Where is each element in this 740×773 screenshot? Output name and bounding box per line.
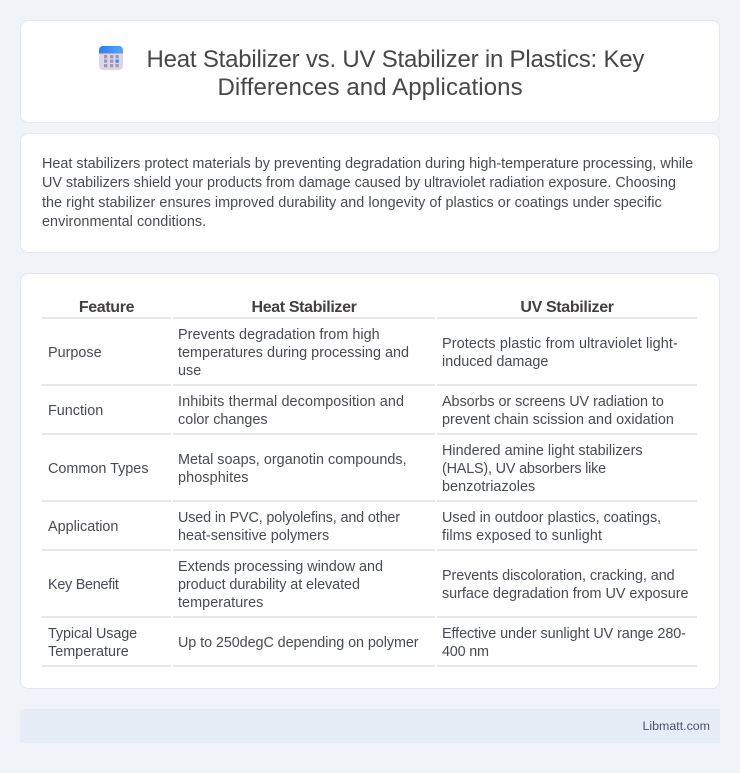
row: purpose: induced damage — [442, 354, 548, 370]
row: typical usage temperature — [48, 626, 686, 660]
title: Heat Stabilizer vs. UV Stabilizer in Plastics: Key — [146, 46, 644, 73]
row: function: prevent chain scission and oxidation — [442, 412, 674, 428]
row: typical usage temperature: Effective under sunlight UV range 280- — [442, 626, 686, 642]
row: typical usage temperature: Typical Usage — [48, 626, 137, 642]
table card — [20, 273, 720, 689]
intro card — [20, 133, 720, 253]
icon: calendar — [99, 46, 123, 70]
row: typical usage temperature: Up to 250degC depending on polymer — [178, 635, 418, 651]
title — [146, 46, 644, 101]
row: key benefit: Prevents discoloration, cracking, and — [442, 568, 675, 584]
row: key benefit: product durability at elevated — [178, 577, 360, 593]
row: purpose: temperatures during processing and — [178, 345, 409, 361]
title: Differences and Applications — [218, 74, 523, 101]
title card — [20, 20, 720, 123]
row: function: Function — [48, 403, 103, 419]
row: key benefit: Key Benefit — [48, 577, 119, 593]
row: key benefit: Extends processing window and — [178, 559, 383, 575]
intro text: environmental conditions. — [42, 214, 206, 230]
intro text: UV stabilizers shield your products from damage caused by ultraviolet radiation exposure. Choosing — [42, 175, 676, 191]
row: application: Application — [48, 519, 118, 535]
row: common types: phosphites — [178, 470, 249, 486]
row: function — [48, 394, 674, 428]
row: purpose: Purpose — [48, 345, 102, 361]
row: application: Used in outdoor plastics, coatings, — [442, 510, 661, 526]
row: application: Used in PVC, polyolefins, and other — [178, 510, 400, 526]
row: function: Absorbs or screens UV radiation to — [442, 394, 664, 410]
row: typical usage temperature: 400 nm — [442, 644, 489, 660]
row: common types: Hindered amine light stabilizers — [442, 443, 643, 459]
row: typical usage temperature: Temperature — [48, 644, 129, 660]
row: purpose: use — [178, 363, 201, 379]
intro text: the right stabilizer ensures improved durability and longevity of plastics or coatings under specific — [42, 195, 662, 211]
row: key benefit: surface degradation from UV exposure — [442, 586, 688, 602]
intro text: Heat stabilizers protect materials by preventing degradation during high-temperature processing, while — [42, 156, 693, 172]
row: function: color changes — [178, 412, 268, 428]
comparison table — [42, 317, 697, 667]
row: common types — [48, 443, 643, 495]
footer text: Libmatt.com — [643, 719, 710, 733]
row: key benefit: temperatures — [178, 595, 263, 611]
row: purpose: Protects plastic from ultraviolet light- — [442, 336, 678, 352]
intro text — [42, 156, 693, 230]
table header: Feature — [79, 299, 134, 316]
row: common types: (HALS), UV absorbers like — [442, 461, 606, 477]
row: purpose — [48, 327, 678, 379]
table header: Heat Stabilizer — [251, 299, 356, 316]
row: common types: Metal soaps, organotin compounds, — [178, 452, 407, 468]
row: application — [48, 510, 661, 544]
row: common types: Common Types — [48, 461, 149, 477]
footer bar — [20, 709, 720, 743]
row: application: films exposed to sunlight — [442, 528, 602, 544]
row: key benefit — [48, 559, 688, 611]
row: purpose: Prevents degradation from high — [178, 327, 380, 343]
table header: UV Stabilizer — [520, 299, 614, 316]
row: function: Inhibits thermal decomposition and — [178, 394, 404, 410]
row: common types: benzotriazoles — [442, 479, 535, 495]
table header — [79, 299, 614, 316]
row: application: heat-sensitive polymers — [178, 528, 329, 544]
